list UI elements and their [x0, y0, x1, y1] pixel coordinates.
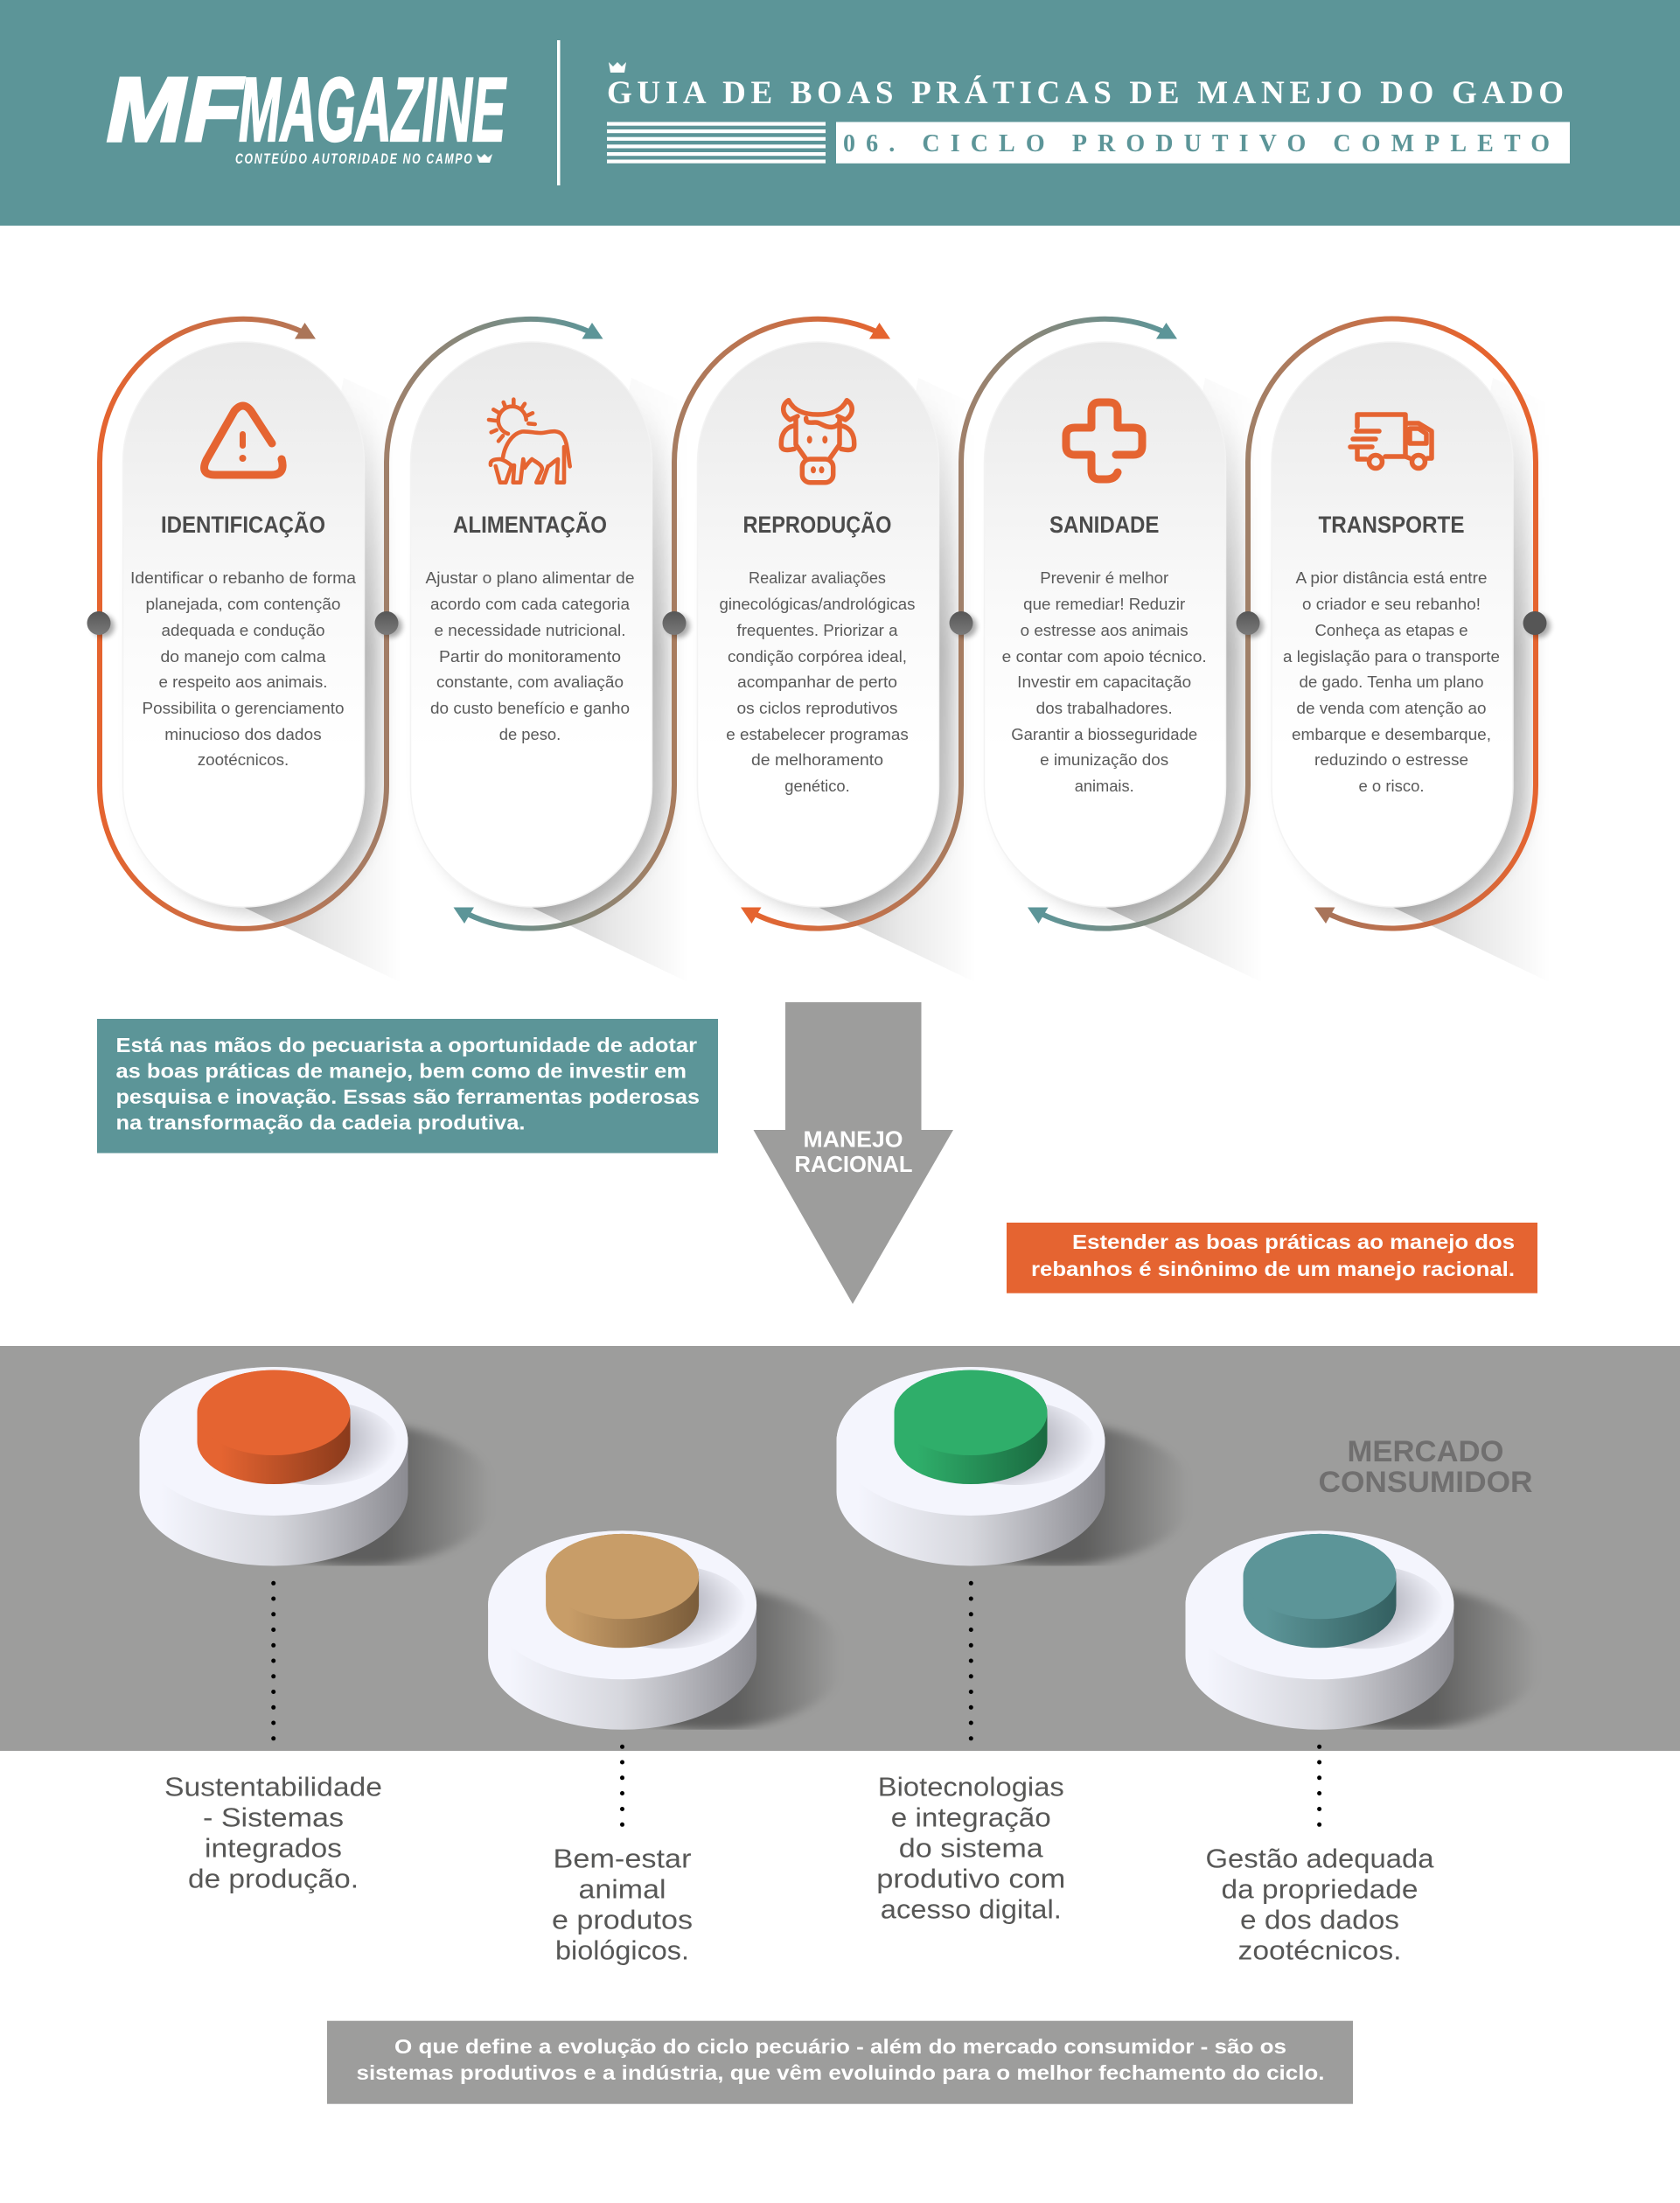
icon: truck: [1350, 415, 1432, 469]
callout: teal: as boas práticas de manejo, bem como de investir em: [115, 1060, 687, 1083]
callout: orange: Estender as boas práticas ao manejo dos: [1072, 1230, 1515, 1253]
long shadows of the cards: [150, 406, 1539, 969]
card: Sanidade: [985, 342, 1226, 907]
body text: Ajustar o plano alimentar de: [425, 568, 635, 587]
body text: Partir do monitoramento: [439, 647, 621, 666]
logo: MF Magazine: MAGAZINE: [239, 59, 506, 161]
callout: bottom grey: sistemas produtivos e a indústria, que vêm evoluindo para o melhor fechamento do ciclo.: [357, 2061, 1324, 2084]
label: sustentabilidade: integrados: [205, 1833, 342, 1863]
body text: e contar com apoio técnico.: [1002, 647, 1207, 666]
cylinder: teal: [1186, 1530, 1544, 1730]
dotted leader 2: [620, 1745, 624, 1827]
icon: crown: [609, 62, 626, 73]
card: Identificação: [122, 342, 364, 907]
dotted leader 1: [271, 1581, 275, 1740]
callout: teal: na transformação da cadeia produtiva.: [115, 1111, 525, 1133]
label: bem-estar: animal: [579, 1873, 666, 1905]
label: gestão: Gestão adequada: [1205, 1844, 1434, 1874]
body text: genético.: [784, 777, 850, 795]
body text: condição corpórea ideal,: [728, 647, 907, 666]
body text: [425, 568, 635, 743]
body text: e imunização dos: [1040, 750, 1168, 769]
title: GUIA DE BOAS PRÁTICAS DE MANEJO DO GADO: [607, 74, 1564, 111]
body text: [1283, 568, 1500, 795]
label: biotecnologias: produtivo com: [876, 1863, 1065, 1893]
body text: [1002, 568, 1207, 795]
label: sustentabilidade: Sustentabilidade: [164, 1771, 382, 1802]
icon: medical cross: [1066, 402, 1142, 479]
arrow: cycle ring 2: [387, 319, 674, 929]
body text: acompanhar de perto: [737, 673, 897, 691]
body text: do custo benefício e ganho: [430, 699, 630, 717]
callout: teal: Está nas mãos do pecuarista a oportunidade de adotar: [115, 1034, 697, 1056]
body text: Garantir a biosseguridade: [1011, 725, 1197, 743]
body text: de peso.: [499, 725, 561, 743]
card: Transporte: [1272, 342, 1513, 907]
label: biotecnologias: [876, 1771, 1065, 1924]
label: sustentabilidade: [164, 1771, 382, 1893]
callout: bottom grey: O que define a evolução do ciclo pecuário - além do mercado consumidor - são os: [394, 2035, 1286, 2058]
body text: planejada, com contenção: [145, 595, 341, 613]
heading: mercado consumidor: CONSUMIDOR: [1319, 1466, 1532, 1499]
stripes decoration: [607, 122, 826, 164]
heading: TRANSPORTE: [1319, 512, 1464, 538]
body text: constante, com avaliação: [436, 673, 624, 691]
heading: mercado consumidor: [1319, 1435, 1532, 1499]
cylinder: tan: [488, 1530, 847, 1730]
subtitle box: 06. CICLO PRODUTIVO COMPLETO: [843, 130, 1550, 157]
label: bem-estar: e produtos: [552, 1905, 693, 1935]
body text: Investir em capacitação: [1017, 673, 1191, 691]
arrow: cycle ring 4: [961, 319, 1248, 929]
body text: minucioso dos dados: [164, 725, 322, 743]
body text: de venda com atenção ao: [1296, 699, 1487, 717]
panel: grey band: [0, 1346, 1680, 1751]
dotted leader 4: [1317, 1745, 1321, 1827]
arrow: manejo racional: [754, 1002, 953, 1304]
arrow: cycle ring 3: [674, 319, 961, 929]
header divider: [557, 40, 560, 185]
body text: embarque e desembarque,: [1292, 725, 1491, 743]
body text: [719, 568, 915, 795]
callout: teal: pesquisa e inovação. Essas são ferramentas poderosas: [115, 1085, 700, 1108]
body text: Identificar o rebanho de forma: [130, 568, 357, 587]
label: biotecnologias: Biotecnologias: [878, 1771, 1064, 1802]
body text: o estresse aos animais: [1021, 621, 1189, 639]
callout: teal: [97, 1019, 718, 1153]
body text: animais.: [1075, 777, 1134, 795]
heading: SANIDADE: [1049, 512, 1159, 538]
body text: Prevenir é melhor: [1040, 568, 1168, 587]
label: biotecnologias: acesso digital.: [881, 1893, 1062, 1924]
heading: mercado consumidor: MERCADO: [1347, 1435, 1504, 1468]
dotted leader 3: [969, 1581, 973, 1740]
icon: warning triangle: [205, 406, 282, 475]
callout: bottom grey: [327, 2021, 1353, 2104]
body text: e necessidade nutricional.: [434, 621, 626, 639]
label: gestão: da propriedade: [1221, 1873, 1419, 1905]
body text: e estabelecer programas: [726, 725, 909, 743]
logo: MF Magazine: MF: [107, 59, 245, 161]
body text: Possibilita o gerenciamento: [142, 699, 345, 717]
callout: orange: [1007, 1223, 1537, 1293]
label: bem-estar: biológicos.: [555, 1935, 689, 1966]
logo: MF Magazine: [107, 59, 506, 168]
label: sustentabilidade: - Sistemas: [203, 1802, 344, 1833]
body text: os ciclos reprodutivos: [736, 699, 897, 717]
body text: A pior distância está entre: [1296, 568, 1487, 587]
label: biotecnologias: e integração: [891, 1802, 1051, 1833]
label: bem-estar: [552, 1844, 693, 1966]
arrow: cycle ring 5: [1248, 318, 1536, 929]
body text: e respeito aos animais.: [159, 673, 327, 691]
logo: MF Magazine: CONTEÚDO AUTORIDADE NO CAMPO: [235, 150, 472, 168]
arrow: manejo racional: RACIONAL: [794, 1151, 913, 1177]
body text: [130, 568, 357, 769]
body text: e o risco.: [1359, 777, 1424, 795]
body text: de gado. Tenha um plano: [1300, 673, 1483, 691]
icon: cow head: [781, 401, 854, 483]
arrow: manejo racional: MANEJO: [803, 1126, 903, 1153]
label: gestão: e dos dados: [1240, 1905, 1399, 1935]
body text: de melhoramento: [751, 750, 883, 769]
body text: adequada e condução: [161, 621, 325, 639]
body text: que remediar! Reduzir: [1023, 595, 1185, 613]
body text: frequentes. Priorizar a: [736, 621, 898, 639]
icon: cow grazing under sun: [489, 400, 570, 483]
body text: o criador e seu rebanho!: [1302, 595, 1481, 613]
connector knobs: [87, 611, 1551, 638]
label: sustentabilidade: de produção.: [188, 1863, 359, 1893]
card: Reprodução: [698, 342, 939, 907]
label: gestão: [1205, 1844, 1434, 1966]
body text: Conheça as etapas e: [1315, 621, 1467, 639]
header banner: [0, 0, 1680, 226]
body text: ginecológicas/andrológicas: [719, 595, 915, 613]
label: gestão: zootécnicos.: [1238, 1935, 1401, 1966]
heading: REPRODUÇÃO: [743, 512, 892, 538]
heading: IDENTIFICAÇÃO: [161, 512, 325, 538]
body text: Realizar avaliações: [749, 568, 886, 587]
arrow: cycle ring 1: [100, 319, 387, 929]
heading: ALIMENTAÇÃO: [453, 512, 607, 538]
label: bem-estar: Bem-estar: [553, 1844, 691, 1874]
card: Alimentação: [411, 342, 652, 907]
body text: reduzindo o estresse: [1314, 750, 1468, 769]
subtitle box: [836, 122, 1570, 164]
cylinder: green: [836, 1367, 1195, 1565]
cylinder: orange: [140, 1367, 498, 1565]
body text: a legislação para o transporte: [1283, 647, 1500, 666]
body text: do manejo com calma: [161, 647, 326, 666]
body text: acordo com cada categoria: [430, 595, 631, 613]
body text: zootécnicos.: [198, 750, 289, 769]
callout: orange: rebanhos é sinônimo de um manejo racional.: [1031, 1258, 1515, 1280]
body text: dos trabalhadores.: [1036, 699, 1173, 717]
label: biotecnologias: do sistema: [899, 1833, 1044, 1863]
